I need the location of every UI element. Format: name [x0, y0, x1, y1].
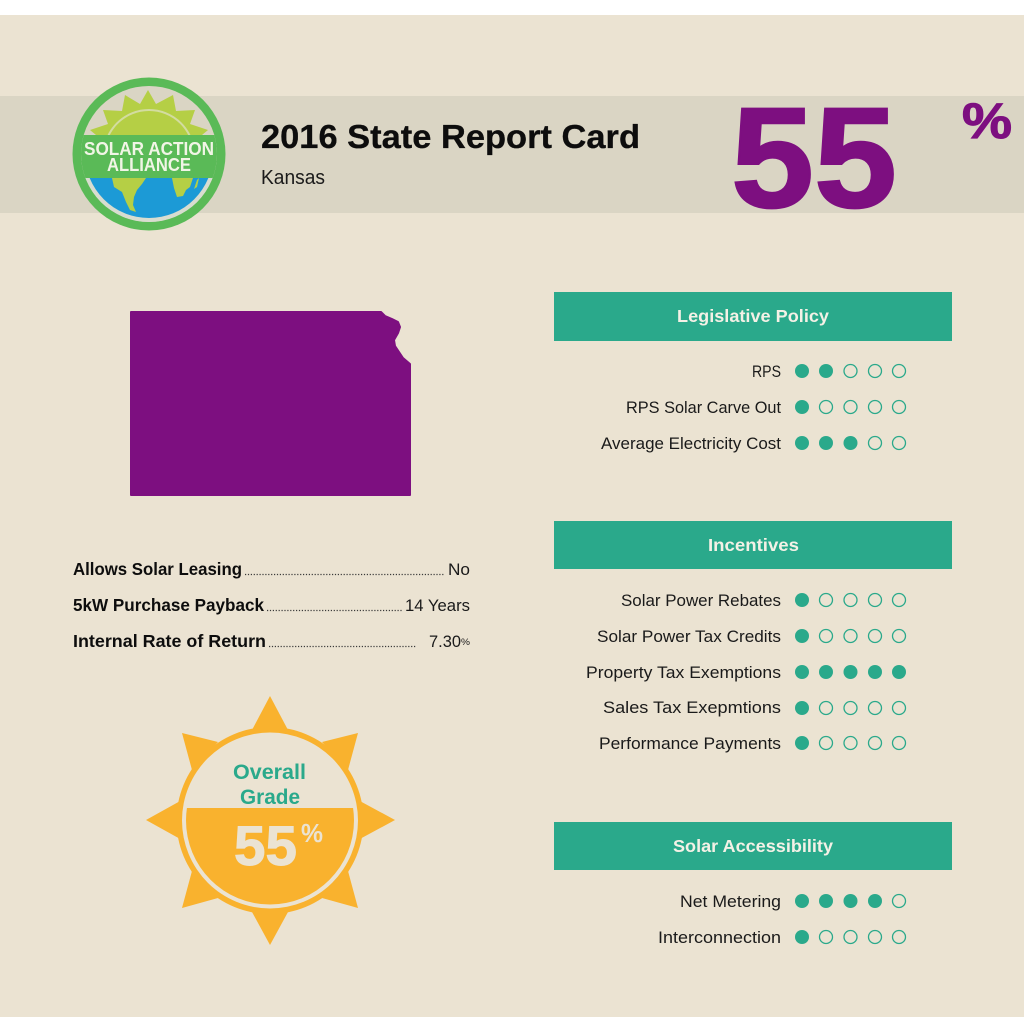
fact: solar leasing [73, 559, 470, 579]
heading: solar accessibility [554, 822, 952, 870]
heading: solar accessibility: Solar Accessibility [673, 836, 833, 856]
fact: internal rate of return: % [461, 637, 470, 647]
rating row: RPS solar carve out, 1 of 5 [626, 398, 906, 417]
icon: overall grade sun badge: % [301, 818, 323, 848]
icon: Solar Action Alliance logo: SOLAR ACTION [84, 139, 214, 159]
rating row: average electricity cost, 3 of 5 [601, 434, 906, 453]
icon: Solar Action Alliance logo [72, 78, 226, 230]
title: 2016 State Report Card [261, 118, 640, 155]
state name: Kansas [261, 167, 325, 189]
icon: overall grade sun badge: Overall [233, 761, 306, 784]
icon: overall grade sun badge: Grade [240, 786, 300, 809]
rating row: RPS, 2 of 5: RPS [752, 362, 781, 381]
facts list [73, 559, 470, 651]
panel: legislative policy [554, 292, 952, 453]
overall score number: 55 [731, 79, 897, 238]
rating row: interconnection, 1 of 5 [658, 928, 906, 947]
fact: internal rate of return: Internal Rate of Return [73, 631, 266, 651]
fact: solar leasing: No [448, 560, 470, 579]
rating row: net metering, 4 of 5 [680, 892, 906, 911]
rating row: solar power rebates, 1 of 5 [621, 591, 906, 610]
rating row: solar power tax credits, 1 of 5 [597, 627, 906, 646]
rating row: sales tax exemptions, 1 of 5 [603, 698, 906, 717]
fact: purchase payback [73, 595, 470, 615]
overall score percent sign: % [962, 93, 1012, 149]
rating row: interconnection, 1 of 5: Interconnection [658, 928, 781, 947]
fact: solar leasing: Allows Solar Leasing [73, 559, 242, 579]
heading: legislative policy [554, 292, 952, 341]
rating row: performance payments, 1 of 5 [599, 734, 906, 753]
rating row: RPS, 2 of 5 [752, 362, 906, 381]
fact: internal rate of return [73, 631, 470, 651]
rating row: average electricity cost, 3 of 5: Average Electricity Cost [601, 434, 781, 453]
header band [0, 96, 1024, 213]
rating row: property tax exemptions, 5 of 5 [586, 663, 906, 682]
icon: overall grade sun badge: 55 [234, 814, 297, 877]
fact: purchase payback: 14 Years [405, 596, 470, 615]
rating row: property tax exemptions, 5 of 5: Property Tax Exemptions [586, 663, 781, 682]
icon: Solar Action Alliance logo: ALLIANCE [107, 155, 191, 175]
panel: incentives [554, 521, 952, 753]
heading: incentives: Incentives [708, 535, 799, 555]
map: Kansas [131, 312, 410, 495]
heading: incentives [554, 521, 952, 569]
fact: purchase payback: 5kW Purchase Payback [73, 595, 264, 615]
panel: solar accessibility [554, 822, 952, 947]
heading: legislative policy: Legislative Policy [677, 306, 829, 326]
rating row: solar power rebates, 1 of 5: Solar Power Rebates [621, 591, 781, 610]
rating row: net metering, 4 of 5: Net Metering [680, 892, 781, 911]
rating row: performance payments, 1 of 5: Performance Payments [599, 734, 781, 753]
rating row: RPS solar carve out, 1 of 5: RPS Solar Carve Out [626, 398, 781, 417]
rating row: sales tax exemptions, 1 of 5: Sales Tax Exepmtions [603, 698, 781, 717]
icon: overall grade sun badge [146, 696, 395, 945]
rating row: solar power tax credits, 1 of 5: Solar Power Tax Credits [597, 627, 781, 646]
fact: internal rate of return: 7.30 [429, 632, 461, 651]
